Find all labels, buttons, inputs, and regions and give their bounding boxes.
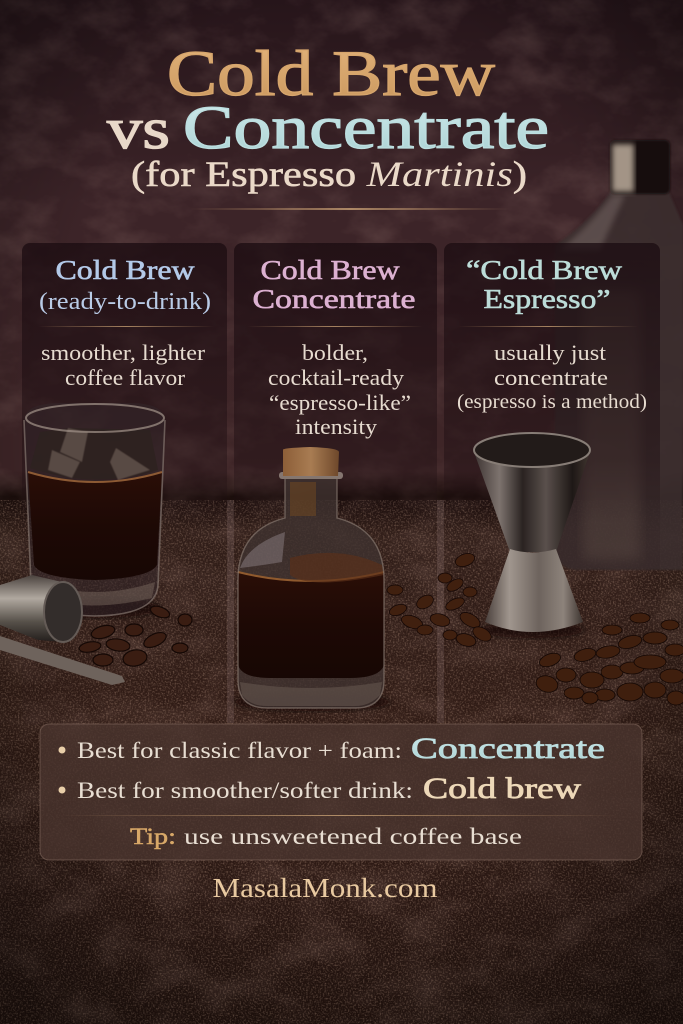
icon: concentrate bottle with cork xyxy=(234,447,390,711)
heading: cold brew concentrate: Concentrate xyxy=(252,284,416,314)
column gap highlights xyxy=(227,500,444,723)
text: concentrate description: bolder, xyxy=(302,340,368,365)
title: (for Espresso Martinis ) xyxy=(131,154,527,194)
panel: recommendations box xyxy=(40,724,642,860)
icon: scattered coffee beans left xyxy=(78,604,192,668)
icon: metal jigger xyxy=(474,433,590,638)
text: cold brew description xyxy=(41,340,206,390)
title: Concentrate xyxy=(183,95,549,162)
tip xyxy=(130,824,522,849)
title xyxy=(107,38,549,194)
icon: jigger tool lying on table xyxy=(0,575,125,685)
bullet: smoother drink: Best for smoother/softer drink: xyxy=(77,778,413,803)
icon: coffee beans center xyxy=(387,551,494,648)
heading: cold brew: (ready-to-drink) xyxy=(39,289,211,315)
text: cold brew espresso description: (espresso is a method) xyxy=(457,391,647,413)
bullet: classic flavor xyxy=(58,732,605,765)
title: Cold Brew xyxy=(167,38,495,110)
title: vs xyxy=(107,96,170,161)
heading: cold brew espresso xyxy=(466,255,623,314)
bullet: classic flavor: Best for classic flavor + foam: xyxy=(77,738,402,763)
heading: cold brew concentrate: Cold Brew xyxy=(260,255,400,285)
column dividers xyxy=(38,326,638,327)
heading: cold brew espresso: Espresso” xyxy=(484,284,610,314)
heading: cold brew xyxy=(39,255,211,315)
icon: blurred cocktail shaker in background xyxy=(555,140,683,570)
tip: use unsweetened coffee base xyxy=(184,824,522,849)
panel: cold brew column background xyxy=(22,243,227,725)
heading: cold brew concentrate xyxy=(252,255,416,314)
text: cold brew espresso description xyxy=(457,340,647,413)
text: cold brew espresso description: usually just xyxy=(494,340,606,365)
text: concentrate description: “espresso-like” xyxy=(269,390,411,415)
text: cold brew espresso description: concentrate xyxy=(494,365,608,390)
text: cold brew description: smoother, lighter xyxy=(41,340,206,365)
heading: cold brew espresso: “Cold Brew xyxy=(466,255,623,285)
text: concentrate description xyxy=(268,340,411,439)
text: concentrate description: cocktail-ready xyxy=(268,365,404,390)
title divider xyxy=(190,208,510,210)
panel: cold brew espresso column background xyxy=(444,243,660,725)
bullet: smoother drink: Cold brew xyxy=(423,772,581,805)
bullet: smoother drink xyxy=(58,772,581,805)
text: cold brew description: coffee flavor xyxy=(65,365,186,390)
text: concentrate description: intensity xyxy=(295,414,377,439)
bullet: classic flavor: Concentrate xyxy=(411,732,605,765)
icon: coffee bean pile right xyxy=(534,613,683,705)
heading: cold brew: Cold Brew xyxy=(56,255,195,285)
icon: iced coffee glass xyxy=(24,403,165,618)
footer: website: MasalaMonk.com xyxy=(212,873,438,903)
panel: concentrate column background xyxy=(234,243,437,725)
tip: Tip: xyxy=(130,824,176,849)
